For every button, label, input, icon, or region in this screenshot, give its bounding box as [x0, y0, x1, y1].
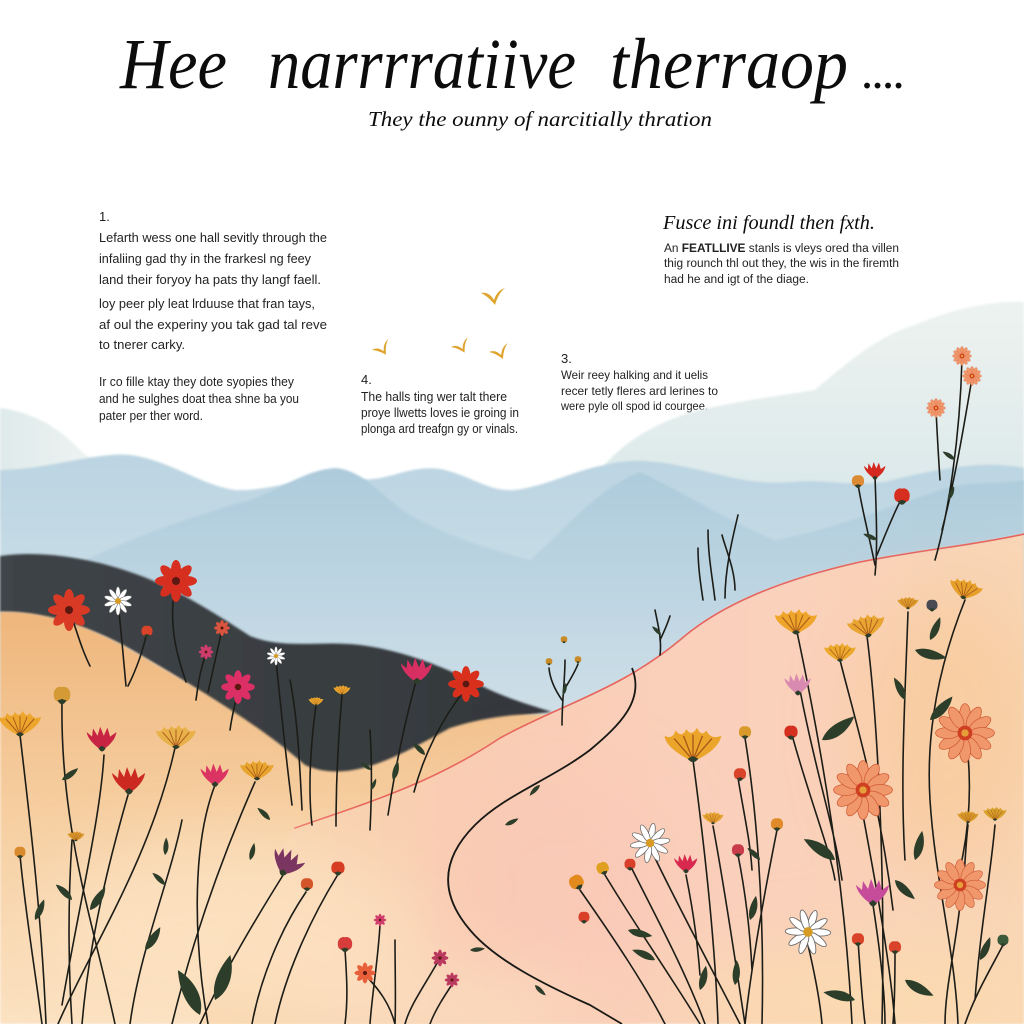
- text block 4: The halls ting wer talt there: [361, 389, 507, 404]
- text block: founding note: [662, 212, 899, 286]
- blue mountain range: [0, 455, 1024, 720]
- text block 4: [361, 372, 519, 436]
- text block 3: were pyle oll spod id courgee.: [560, 399, 708, 413]
- text block 3: recer tetly fleres ard lerines to: [561, 384, 718, 398]
- flowers foreground left: [0, 687, 459, 1024]
- text block 1: to tnerer carky.: [99, 337, 185, 352]
- blue mid mountain: [85, 468, 1024, 720]
- flowers on dark hill: [48, 560, 484, 830]
- text block 1: [99, 209, 327, 352]
- pink foreground hill with red ridge line: [200, 534, 1024, 1024]
- text block 3: 3.: [561, 351, 572, 366]
- text block 4: plonga ard treafgn gy or vinals.: [361, 421, 518, 436]
- text block 2: pater per ther word.: [99, 408, 203, 423]
- subtitle: They the ounny of narcitially thration: [368, 107, 712, 131]
- text block: founding note: thig rounch thl out they, the wis in the firemth: [664, 258, 899, 270]
- watercolor washes: [40, 590, 1024, 1024]
- dark slate hill: [0, 554, 552, 779]
- text block 1: af oul the experiny you tak gad tal reve: [99, 317, 327, 332]
- text block: founding note: An FEATLLIVE stanls is vleys ored tha villen: [664, 243, 899, 255]
- title: ....: [862, 43, 906, 99]
- title: Hee: [119, 24, 227, 104]
- flowers foreground right: [567, 575, 1009, 1024]
- text block 1: infaliing gad thy in the frarkesl ng feey: [99, 251, 311, 266]
- pale distant mountains: [0, 302, 1024, 560]
- text block 1: Lefarth wess one hall sevitly through the: [99, 230, 327, 245]
- text block 2: [99, 374, 299, 423]
- text block 2: Ir co fille ktay they dote syopies they: [99, 374, 294, 389]
- title: narrrratiive: [268, 24, 576, 104]
- text block: founding note: had he and igt of the diage.: [664, 274, 809, 286]
- text block: founding note: Fusce ini foundl then fxth.: [662, 212, 875, 234]
- text block 3: [560, 351, 718, 413]
- title: therraop: [610, 24, 848, 104]
- text block 4: 4.: [361, 372, 372, 387]
- text block 1: land their foryoy ha pats thy langf faell.: [99, 272, 321, 287]
- sprigs on the ridge: [546, 346, 982, 725]
- icon: birds: [371, 288, 511, 362]
- text block 1: loy peer ply leat lrduuse that fran tays,: [99, 296, 315, 311]
- sand foreground hill: [0, 612, 640, 1024]
- text block 2: and he sulghes doat thea shne ba you: [99, 391, 299, 406]
- title: [119, 24, 906, 104]
- text block 4: proye llwetts loves ie groing in: [361, 405, 519, 420]
- text block 1: 1.: [99, 209, 110, 224]
- winding path: [448, 668, 636, 1024]
- text block 3: Weir reey halking and it uelis: [561, 368, 708, 382]
